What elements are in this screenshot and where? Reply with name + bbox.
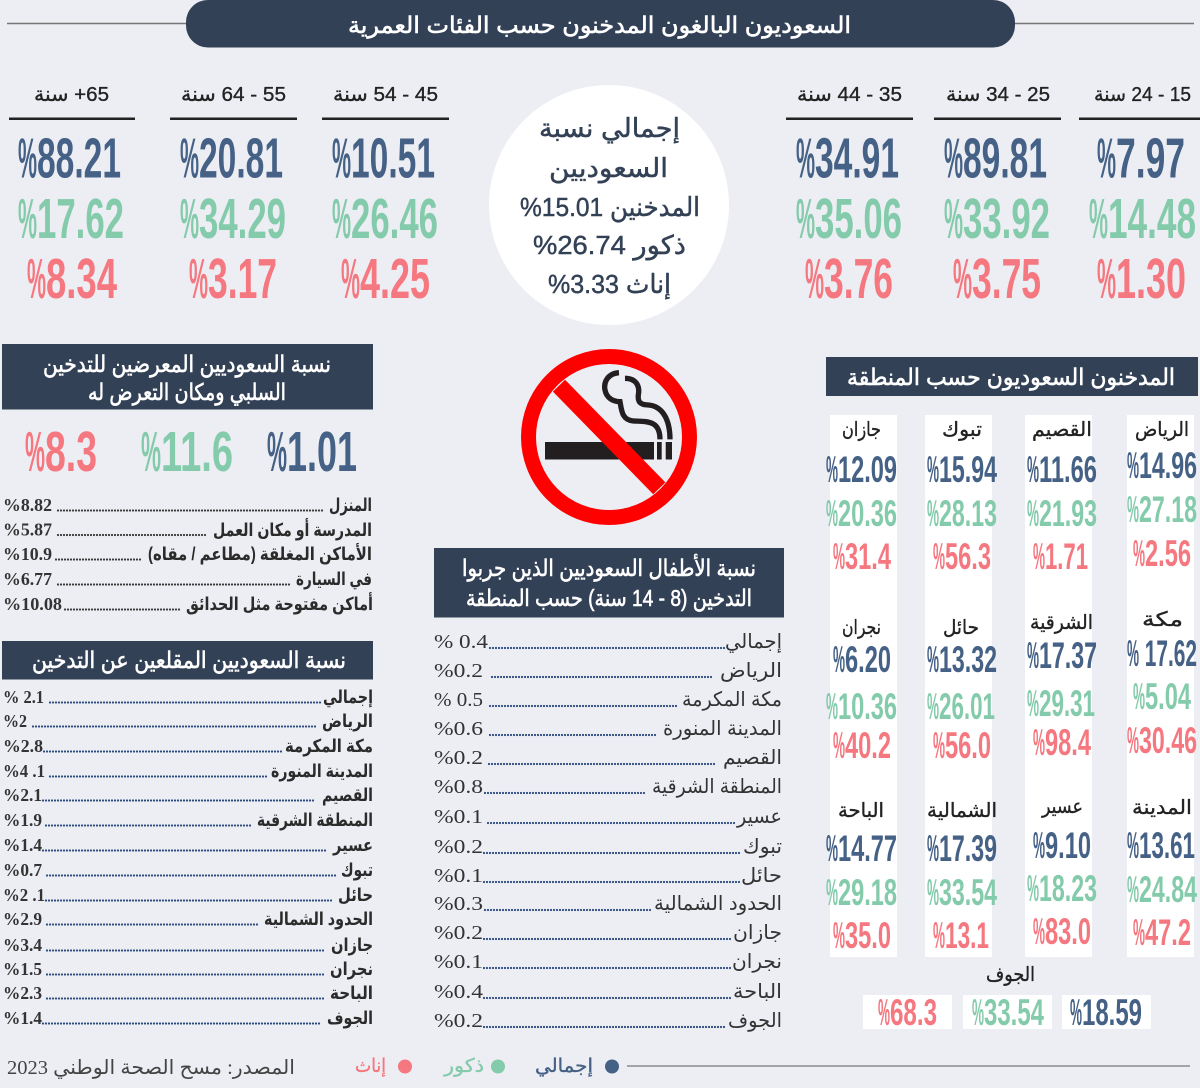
region: Jouf: %18.59	[1070, 992, 1142, 1033]
row: home: المنزل	[329, 495, 372, 516]
row: Madinah	[3, 761, 373, 782]
age column: 25-34	[934, 84, 1061, 311]
title banner: السعوديون البالغون المدخنون حسب الفئات العمرية	[348, 12, 851, 39]
row: Jazan: %0.2	[434, 922, 483, 944]
region: Qassim: %1.71	[1033, 536, 1088, 577]
row: Hail	[3, 885, 373, 905]
row: Makkah	[434, 689, 782, 711]
list: exposure places	[3, 495, 373, 615]
row: Baha: الباحة	[330, 983, 373, 1003]
row: Baha: %0.4	[434, 981, 483, 1003]
panel: quitters heading	[2, 641, 373, 680]
region: Tabuk: %56.3	[933, 536, 991, 577]
row: home: %8.82	[3, 495, 52, 515]
total smokers circle: ذكور ⁦%26.74⁩	[533, 230, 686, 261]
region: Riyadh: الرياض	[1135, 419, 1189, 441]
age column: 45-54: 45 - 54 سنة	[333, 84, 438, 106]
region: Hail: %26.01	[927, 686, 995, 727]
legend: إجمالي	[535, 1056, 593, 1078]
row: Najran	[434, 951, 782, 973]
region: Madinah	[1127, 797, 1197, 953]
region: Jazan	[826, 419, 897, 577]
row: Madinah: المدينة المنورة	[271, 761, 373, 782]
passive smoking totals	[25, 420, 357, 484]
row: Baha: %2.3	[3, 983, 42, 1003]
region: Jouf: %33.54	[972, 992, 1044, 1033]
region: Qassim: القصيم	[1032, 419, 1092, 441]
region: Asir	[1027, 796, 1097, 952]
row: Hail: حائل	[338, 885, 373, 905]
list: quitters by region	[3, 687, 373, 1029]
row: Qassim: %0.2	[434, 747, 483, 769]
region: Northern: %13.1	[933, 915, 989, 956]
row: Qassim	[434, 747, 782, 769]
age column: 35-44: 35 - 44 سنة	[797, 84, 902, 106]
region: Jouf: %68.3	[878, 992, 937, 1033]
row: Jouf: الجوف	[728, 1010, 782, 1032]
row: Jouf: الجوف	[327, 1008, 373, 1029]
row: Madinah: %0.6	[434, 718, 483, 740]
region: Baha: الباحة	[838, 800, 884, 822]
row: Makkah: %2.8	[3, 736, 43, 756]
row: Najran: %0.1	[434, 951, 483, 973]
white region column strips	[830, 415, 1194, 957]
total smokers circle: إجمالي نسبة	[539, 113, 680, 144]
region: Jouf	[863, 964, 1151, 1033]
age column: 65+: %8.34	[27, 247, 117, 311]
region: Jazan: %12.09	[826, 449, 897, 490]
panel: passive smoking heading: نسبة السعوديين المعرضين للتدخين	[43, 351, 331, 378]
row: Eastern: المنطقة الشرقية	[652, 776, 782, 798]
row: Makkah: مكة المكرمة	[285, 736, 373, 757]
region: Northern: %33.54	[927, 872, 997, 913]
row: closed places	[3, 543, 372, 565]
legend: ذكور	[443, 1056, 484, 1077]
row: Hail: حائل	[741, 865, 782, 887]
region: Hail	[927, 617, 997, 766]
panel: children heading: نسبة الأطفال السعوديين الذين جربوا	[462, 554, 756, 582]
age column: 35-44: %34.91	[796, 126, 899, 190]
row: Riyadh	[434, 660, 782, 682]
region: Najran: %40.2	[833, 725, 891, 766]
age column: 55-64: 55 - 64 سنة	[181, 84, 286, 106]
region: Jouf: الجوف	[986, 964, 1035, 986]
age column: 55-64: %20.81	[180, 126, 283, 190]
row: total: % 2.1	[3, 687, 44, 707]
age column: 55-64	[170, 84, 297, 311]
row: Madinah: %4 .1	[3, 761, 45, 781]
row: Tabuk: %0.7	[3, 860, 42, 880]
region: Eastern	[1027, 612, 1097, 763]
row: Hail	[434, 865, 782, 887]
row: car: %6.77	[3, 569, 52, 589]
region: Asir: %83.0	[1033, 911, 1091, 952]
row: Tabuk: تبوك	[743, 836, 782, 858]
row: Jazan: جازان	[733, 922, 782, 944]
age column: 35-44: %3.76	[805, 247, 893, 311]
row: Hail: %2 .1	[3, 885, 45, 905]
panel: children heading	[434, 548, 784, 618]
region: Qassim: %11.66	[1027, 449, 1097, 490]
row: total: إجمالي	[725, 631, 782, 654]
row: Makkah	[3, 736, 373, 757]
row: Qassim: القصيم	[723, 747, 782, 769]
panel: regions heading	[826, 357, 1198, 396]
row: open places: %10.08	[3, 594, 62, 614]
total smokers circle: إناث ⁦%3.33⁩	[548, 269, 671, 300]
row: closed places: %10.9	[3, 544, 52, 564]
passive smoking totals: %8.3	[25, 420, 97, 484]
row: Asir: %1.4	[3, 835, 42, 855]
row: Jazan	[3, 935, 373, 955]
row: open places: أماكن مفتوحة مثل الحدائق	[186, 592, 373, 615]
row: Baha	[434, 981, 782, 1003]
row: Northern Borders: الحدود الشمالية	[264, 909, 373, 930]
region: Makkah: مكة	[1142, 609, 1183, 631]
region: Jazan: %20.36	[826, 493, 897, 534]
row: Jouf	[3, 1008, 373, 1029]
row: Asir: %0.1	[434, 806, 483, 828]
row: Eastern	[3, 810, 373, 831]
age column: 15-24	[1079, 84, 1200, 311]
age column: 35-44: %35.06	[796, 187, 902, 251]
region: Northern: الشمالية	[927, 800, 997, 822]
row: Northern Borders: %0.3	[434, 893, 483, 915]
panel: passive smoking heading: السلبي ومكان التعرض له	[88, 379, 286, 406]
row: Baha	[3, 983, 373, 1003]
passive smoking totals: %1.01	[267, 420, 357, 484]
row: Jazan: جازان	[331, 935, 373, 955]
row: Jazan	[434, 922, 782, 944]
age column: 45-54: %10.51	[332, 126, 435, 190]
icon: no smoking sign	[528, 356, 690, 518]
panel: regions heading: المدخنون السعوديون حسب المنطقة	[847, 364, 1175, 391]
row: Najran: %1.5	[3, 959, 42, 979]
legend: إناث	[355, 1056, 386, 1078]
row: Asir: عسير	[332, 835, 373, 856]
row: Jouf	[434, 1010, 782, 1032]
panel: quitters heading: نسبة السعوديين المقلعين عن التدخين	[32, 647, 346, 674]
region: Eastern: %29.31	[1027, 683, 1095, 724]
region: Qassim: %21.93	[1027, 493, 1097, 534]
row: school or work: المدرسة أو مكان العمل	[213, 518, 372, 541]
region: Najran: %10.36	[826, 686, 897, 727]
age column: 45-54: %4.25	[341, 247, 430, 311]
row: Tabuk: %0.2	[434, 836, 483, 858]
region: Tabuk	[927, 419, 997, 577]
region: Najran: نجران	[842, 617, 881, 639]
row: total	[3, 687, 373, 708]
row: Riyadh: الرياض	[322, 711, 373, 732]
title banner	[186, 0, 1015, 48]
age column: 65+	[9, 84, 135, 311]
region: Najran: %6.20	[833, 639, 891, 680]
row: Eastern	[434, 776, 782, 798]
row: car: في السيارة	[296, 569, 372, 590]
region: Asir: عسير	[1041, 796, 1083, 818]
region: Eastern: %98.4	[1033, 722, 1091, 763]
region: Baha	[826, 800, 897, 956]
row: Jazan: %3.4	[3, 935, 42, 955]
age column: 45-54	[322, 84, 449, 311]
row: Madinah: المدينة المنورة	[663, 718, 782, 740]
age column: 15-24: 15 - 24 سنة	[1094, 84, 1191, 106]
row: Najran: نجران	[330, 959, 373, 980]
row: Northern Borders: %2.9	[3, 909, 42, 929]
region: Hail: حائل	[943, 617, 979, 639]
row: Tabuk	[3, 860, 373, 881]
total smokers circle: السعوديين	[549, 153, 668, 184]
row: total	[434, 631, 782, 654]
row: Qassim: القصيم	[322, 785, 373, 805]
row: Asir: عسير	[736, 806, 782, 828]
panel: children heading: التدخين (8 - 14 سنة) حسب المنطقة	[466, 585, 752, 612]
region: Eastern: الشرقية	[1030, 612, 1093, 634]
region: Baha: %35.0	[833, 915, 891, 956]
region: Riyadh	[1127, 419, 1197, 574]
passive smoking totals: %11.6	[141, 420, 233, 484]
panel: passive smoking heading	[2, 344, 373, 410]
row: Najran	[3, 959, 373, 980]
list: children by region	[434, 631, 782, 1032]
row: Asir	[434, 806, 782, 828]
row: Makkah: % 0.5	[434, 689, 483, 711]
row: Northern Borders	[3, 909, 373, 930]
row: Jouf: %0.2	[434, 1010, 483, 1032]
region: Baha: %14.77	[826, 828, 897, 869]
region: Asir: %18.23	[1027, 868, 1097, 909]
region: Baha: %29.18	[826, 872, 897, 913]
row: Qassim: %2.1	[3, 785, 42, 805]
row: Northern Borders	[434, 893, 782, 915]
region: Najran	[826, 617, 897, 766]
legend	[355, 1056, 619, 1078]
row: Riyadh	[3, 711, 373, 732]
row: Baha: الباحة	[733, 981, 782, 1003]
row: Najran: نجران	[732, 951, 782, 973]
age column: 55-64: %34.29	[180, 187, 286, 251]
row: Riyadh: الرياض	[720, 660, 782, 682]
row: total: إجمالي	[323, 687, 373, 708]
region: Tabuk: %28.13	[927, 493, 997, 534]
region: Tabuk: %15.94	[927, 449, 997, 490]
row: school or work	[3, 518, 372, 541]
row: school or work: %5.87	[3, 520, 52, 540]
region: Northern: %17.39	[927, 828, 997, 869]
row: Tabuk: تبوك	[341, 860, 373, 881]
row: Eastern: المنطقة الشرقية	[257, 810, 373, 831]
total smokers circle	[489, 85, 729, 325]
age column: 25-34: %3.75	[953, 247, 1041, 311]
age column: 25-34: 25 - 34 سنة	[946, 84, 1050, 106]
row: Riyadh: %0.2	[434, 660, 483, 682]
source note: المصدر: مسح الصحة الوطني 2023	[7, 1057, 295, 1080]
row: Eastern: %0.8	[434, 776, 483, 798]
region: Northern	[927, 800, 997, 956]
row: total: % 0.4	[434, 631, 488, 653]
age column: 55-64: %3.17	[189, 247, 277, 311]
row: Jouf: %1.4	[3, 1008, 42, 1028]
region: Tabuk: تبوك	[942, 419, 982, 441]
region: Madinah: المدينة	[1132, 797, 1192, 819]
row: Riyadh: %2	[3, 711, 27, 731]
total smokers circle: المدخنين ⁦%15.01⁩	[520, 192, 700, 223]
region: Makkah	[1127, 609, 1197, 761]
row: Tabuk	[434, 836, 782, 858]
row: Eastern: %1.9	[3, 810, 42, 830]
age column: 35-44	[786, 84, 913, 311]
row: closed places: الأماكن المغلقة (مطاعم / مقاه)	[148, 543, 372, 565]
region: Qassim	[1027, 419, 1097, 577]
region: Hail: %56.0	[933, 725, 991, 766]
age column: 65+: %88.21	[18, 126, 121, 190]
row: Madinah	[434, 718, 782, 740]
age column: 45-54: %26.46	[332, 187, 438, 251]
age column: 25-34: %89.81	[944, 126, 1047, 190]
region: Eastern: %17.37	[1027, 635, 1097, 676]
age column: 65+: %17.62	[18, 187, 124, 251]
row: Asir	[3, 835, 373, 856]
age column: 25-34: %33.92	[944, 187, 1050, 251]
row: Northern Borders: الحدود الشمالية	[654, 893, 782, 915]
row: home	[3, 495, 372, 516]
region: Jazan: %31.4	[833, 536, 891, 577]
region: Hail: %13.32	[927, 639, 997, 680]
region: Asir: %9.10	[1033, 825, 1091, 866]
row: Makkah: مكة المكرمة	[682, 689, 782, 711]
row: car	[3, 569, 372, 590]
region: Jazan: جازان	[842, 419, 881, 441]
row: Hail: %0.1	[434, 865, 483, 887]
row: Qassim	[3, 785, 373, 805]
row: open places	[3, 592, 373, 615]
age column: 65+: 65+ سنة	[34, 84, 109, 106]
